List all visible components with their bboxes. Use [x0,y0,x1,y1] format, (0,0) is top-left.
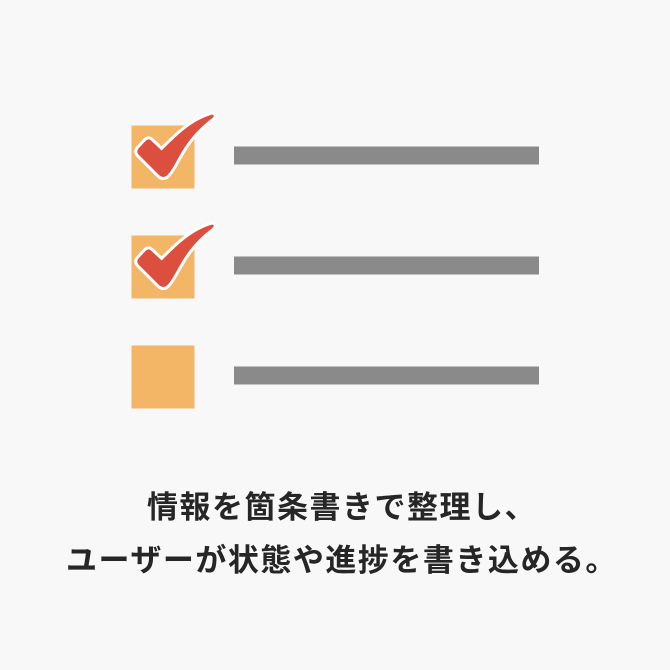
checklist row 2: checked [132,224,539,298]
icon: orange checkbox 1 [132,126,194,188]
icon: red check mark 2 [137,224,214,287]
text line placeholder 3 [234,366,539,384]
checklist row 3: unchecked [132,346,539,408]
checklist row 1: checked [132,114,539,188]
text line placeholder 2 [234,256,539,274]
text line placeholder 1 [234,146,539,164]
caption text [66,490,618,578]
icon: orange checkbox 2 [132,236,194,298]
icon: orange checkbox 3 [132,346,194,408]
icon: red check mark 1 [137,114,214,177]
caption text: ユーザーが状態や進捗を書き込める。 [66,543,618,578]
caption text: 情報を箇条書きで整理し、 [147,490,537,525]
